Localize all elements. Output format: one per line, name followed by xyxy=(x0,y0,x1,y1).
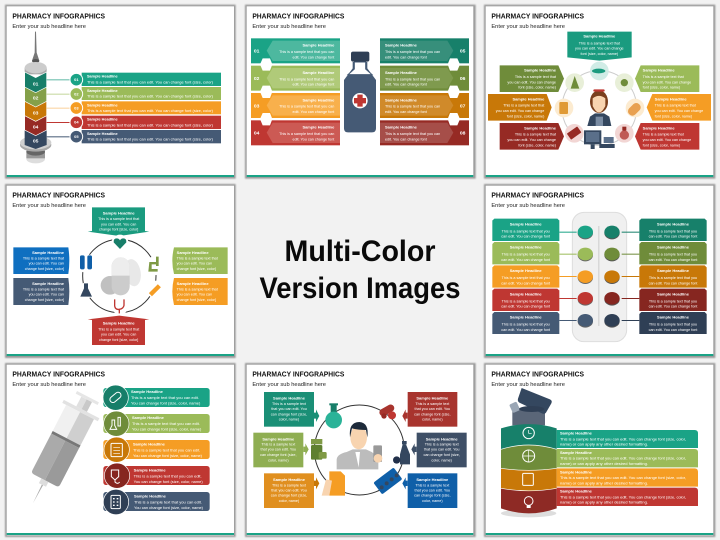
right boxes xyxy=(402,392,467,508)
title: PHARMACY INFOGRAPHICS xyxy=(12,369,105,378)
blister pack xyxy=(572,212,627,342)
row 2: Sample Headline xyxy=(560,450,593,455)
left boxes: can change font (size, xyxy=(271,412,307,416)
right rows: This is a sample text that you can xyxy=(385,50,440,54)
right rows: 08 xyxy=(460,131,466,137)
step 2 xyxy=(47,87,221,100)
right boxes: Sample Headline xyxy=(426,436,458,441)
right boxes: Sample Headline xyxy=(657,291,690,296)
left boxes: Sample Headline xyxy=(510,315,542,320)
icon: flask xyxy=(325,403,342,428)
left boxes: This is a sample text xyxy=(261,443,295,447)
step 1: This is a sample text that you can edit. You can change font (size, color) xyxy=(87,81,213,85)
callouts right xyxy=(635,65,711,150)
sub headline: Enter your sub headline here xyxy=(252,24,326,30)
left rows: Sample Headline xyxy=(302,70,335,75)
sub headline: Enter your sub headline here xyxy=(12,382,86,388)
step 3: 03 xyxy=(74,105,79,110)
left rows: 02 xyxy=(254,76,260,82)
icons around ring xyxy=(77,235,164,315)
right boxes: This is a sample text that you xyxy=(649,253,697,257)
right rows: edit. You can change font xyxy=(385,110,427,114)
row 1: You can change font (size, color, name) xyxy=(131,402,200,406)
right boxes: color, name) xyxy=(422,418,443,422)
right boxes: can edit. You can change font xyxy=(649,328,697,332)
cylinder stack xyxy=(501,424,557,517)
sub headline: Enter your sub headline here xyxy=(491,24,565,30)
connecting ring xyxy=(562,71,637,145)
left boxes: can edit. You can change font xyxy=(501,305,550,309)
right boxes: Sample Headline xyxy=(416,477,449,482)
title: PHARMACY INFOGRAPHICS xyxy=(252,11,344,20)
heading: multi-color version images xyxy=(260,235,460,305)
left boxes: Sample Headline xyxy=(262,436,295,441)
callout top: font (size, color, name) xyxy=(581,52,618,56)
callouts right: font (size, color, name) xyxy=(655,115,692,119)
step 1 xyxy=(47,73,221,86)
callouts left xyxy=(488,65,564,150)
callout top: change font [size, color] xyxy=(99,228,138,232)
right boxes: This is a sample text xyxy=(425,443,459,447)
icon: capsules xyxy=(101,257,143,295)
left boxes: Sample Headline xyxy=(273,477,306,482)
callouts left: Sample Headline xyxy=(524,68,557,73)
callouts right: Sample Headline xyxy=(643,125,675,130)
row 3: Sample Headline xyxy=(133,441,166,446)
step 4: This is a sample text that you can edit. You can change font (size, color) xyxy=(87,123,213,127)
row 4: You can change font (size, color, name) xyxy=(134,480,203,484)
left boxes: Sample Headline xyxy=(510,268,542,273)
left boxes: color, name) xyxy=(279,499,299,503)
row 4: Sample Headline xyxy=(560,489,593,494)
callouts left: you can edit. You can change xyxy=(507,80,556,84)
callouts right: font (size, color, name) xyxy=(643,86,680,90)
right boxes: that you can edit. You xyxy=(424,448,459,452)
callouts right: change font [size, color] xyxy=(177,267,216,271)
panel: syringe list xyxy=(5,363,236,537)
sub headline: Enter your sub headline here xyxy=(252,382,326,388)
syringe illustration: 02 xyxy=(33,96,39,102)
row 4 xyxy=(557,488,698,506)
right boxes: This is a sample text that you xyxy=(649,299,697,303)
left boxes: This is a sample text xyxy=(272,483,306,487)
row 2: Sample Headline xyxy=(132,415,165,420)
row 1: This is a sample text that you can edit. You can change font (size, color, xyxy=(560,437,686,441)
left rows: Sample Headline xyxy=(302,125,335,130)
row 1: name) or can apply any other desired formatting. xyxy=(560,443,648,447)
icon circles xyxy=(555,62,644,143)
right boxes: can change font (size, xyxy=(414,412,451,416)
callouts left: Sample Headline xyxy=(32,281,65,286)
right boxes: color, name) xyxy=(431,458,452,462)
row 4 xyxy=(103,463,210,488)
step 3: Sample Headline xyxy=(87,102,118,107)
row 2: name) or can apply any other desired formatting. xyxy=(560,462,648,466)
right boxes: This is a sample text xyxy=(415,483,449,487)
icon: pharmacist xyxy=(584,89,615,149)
right rows: This is a sample text that you can xyxy=(385,105,440,109)
panel: pill cycle xyxy=(5,184,236,358)
callout bottom: This is a sample text that xyxy=(98,327,139,331)
callouts left: Sample Headline xyxy=(524,125,557,130)
right boxes: that you can edit. You xyxy=(415,407,450,411)
callouts right: This is a sample text that xyxy=(177,287,218,291)
callout top xyxy=(567,32,632,61)
row 2: This is a sample text that you can edit. You can change font (size, color, xyxy=(560,457,686,461)
panel: pharmacist hexagon xyxy=(484,5,715,179)
icon: large syringe xyxy=(15,387,106,512)
syringe illustration xyxy=(20,32,51,163)
sub headline: Enter your sub headline here xyxy=(491,203,565,209)
callouts left: you can edit. You can xyxy=(29,293,64,297)
callouts left: This is a sample text that xyxy=(23,287,64,291)
cycle ring xyxy=(83,239,156,313)
callouts right: This is a sample text that xyxy=(177,256,218,260)
step 3 xyxy=(47,101,221,114)
right boxes: Sample Headline xyxy=(657,315,690,320)
left boxes xyxy=(253,392,319,508)
icon: pills xyxy=(378,403,396,419)
panel: pharmacist cycle xyxy=(245,363,476,537)
callouts left: This is a sample text that xyxy=(515,133,556,137)
callouts right: you can edit. You can xyxy=(177,262,212,266)
left rows xyxy=(251,38,340,145)
row 4: This is a sample text that you can edit. xyxy=(134,474,202,478)
right rows: edit. You can change font xyxy=(385,137,427,141)
row 3: This is a sample text that you can edit. You can change font (size, color, xyxy=(560,476,686,480)
syringe illustration: 04 xyxy=(33,124,39,130)
row 1 xyxy=(103,385,210,410)
step 1: 01 xyxy=(74,77,79,82)
left boxes: Sample Headline xyxy=(510,245,542,250)
left rows: 01 xyxy=(254,49,260,55)
callouts right: Sample Headline xyxy=(655,96,687,101)
icon: blister xyxy=(373,467,402,494)
callout top: you can edit. You can change xyxy=(575,47,624,51)
right rows: Sample Headline xyxy=(385,43,418,48)
callouts right: you can edit. You can change xyxy=(643,80,691,84)
callouts left xyxy=(13,247,69,305)
title: PHARMACY INFOGRAPHICS xyxy=(12,11,105,20)
row 4: Sample Headline xyxy=(134,467,166,472)
left rows: edit. You can change font xyxy=(293,55,334,59)
callouts left: you can edit. You can change xyxy=(507,138,556,142)
callout bottom: Sample Headline xyxy=(103,321,135,326)
row 3: You can change font (size, color, name) xyxy=(133,454,202,458)
step 5 xyxy=(47,130,221,143)
callouts left: This is a sample text that xyxy=(503,104,544,108)
syringe illustration: 01 xyxy=(33,82,39,88)
left boxes: that you can edit. You xyxy=(271,488,307,492)
panel: blister pack xyxy=(484,184,715,358)
row 2: You can change font (size, color, name) xyxy=(132,428,201,432)
right rows: This is a sample text that you can xyxy=(385,132,440,136)
row 2: This is a sample text that you can edit. xyxy=(132,422,200,426)
title: PHARMACY INFOGRAPHICS xyxy=(491,11,584,20)
left boxes: Sample Headline xyxy=(273,396,306,401)
left rows: This is a sample text that you can xyxy=(279,50,334,54)
syringe illustration: 03 xyxy=(33,110,39,116)
left boxes: can edit. You can change font xyxy=(501,328,550,332)
step 5: Sample Headline xyxy=(87,131,118,136)
row 3: Sample Headline xyxy=(560,469,593,474)
left boxes: can edit. You can change font xyxy=(501,281,550,285)
right rows: 07 xyxy=(460,103,466,109)
row 1: Sample Headline xyxy=(560,431,593,436)
step 1: Sample Headline xyxy=(87,74,118,79)
step 4 xyxy=(47,116,221,129)
step 2: Sample Headline xyxy=(87,88,118,93)
row 2 xyxy=(103,411,210,436)
row 5 xyxy=(103,489,210,515)
right boxes: can change font (size, xyxy=(423,453,460,457)
callout top: This is a sample text that xyxy=(98,217,139,221)
callouts left: Sample Headline xyxy=(512,96,545,101)
sub headline: Enter your sub headline here xyxy=(12,24,86,30)
left boxes: can edit. You can change font xyxy=(501,235,550,239)
callout bottom: change font [size, color] xyxy=(99,338,138,342)
callouts left: font (size, color, name) xyxy=(518,86,556,90)
left rows: edit. You can change font xyxy=(293,110,334,114)
left boxes: This is a sample text that you xyxy=(502,229,550,233)
sub headline: Enter your sub headline here xyxy=(491,382,565,388)
callouts left: you can edit. You can xyxy=(29,262,64,266)
left rows: edit. You can change font xyxy=(293,137,334,141)
heading: multi-color version images: Version Images xyxy=(260,272,460,305)
sub headline: Enter your sub headline here xyxy=(12,203,86,209)
callout top: This is a sample text that xyxy=(579,41,620,45)
row 3 xyxy=(557,468,698,487)
right boxes: This is a sample text that you xyxy=(649,323,697,327)
callout top: Sample Headline xyxy=(103,210,135,215)
row 3: name) or can apply any other desired formatting. xyxy=(560,481,648,485)
right rows: edit. You can change font xyxy=(385,55,427,59)
step 5: This is a sample text that you can edit. You can change font (size, color) xyxy=(87,138,213,142)
callouts right: you can edit. You can change xyxy=(655,109,703,113)
row 3 xyxy=(103,437,210,462)
step 2: 02 xyxy=(74,91,79,96)
step 2: This is a sample text that you can edit. You can change font (size, color) xyxy=(87,95,213,99)
callout bottom: you can edit. You can xyxy=(101,333,136,337)
step 4: Sample Headline xyxy=(87,117,118,122)
left rows: This is a sample text that you can xyxy=(279,77,334,81)
icon: prescription xyxy=(322,471,345,496)
callouts left: change font [size, color] xyxy=(25,267,64,271)
right boxes: This is a sample text xyxy=(415,402,449,406)
right rows: This is a sample text that you can xyxy=(385,77,440,81)
cycle ring xyxy=(314,405,404,495)
panel: bottle eight steps xyxy=(245,5,476,179)
left boxes: that you can edit. You xyxy=(271,407,307,411)
right rows: 05 xyxy=(460,49,466,55)
row 4: name) or can apply any other desired formatting. xyxy=(560,501,648,505)
left rows: This is a sample text that you can xyxy=(279,132,334,136)
right rows: Sample Headline xyxy=(385,97,418,102)
left boxes: This is a sample text that you xyxy=(502,323,550,327)
left rows: edit. You can change font xyxy=(293,83,334,87)
icon: dropper bottle xyxy=(393,441,410,464)
right boxes: can edit. You can change font xyxy=(649,305,697,309)
row 5: Sample Headline xyxy=(134,493,167,498)
title: PHARMACY INFOGRAPHICS xyxy=(491,369,584,378)
callouts right: font (size, color, name) xyxy=(643,144,680,148)
callouts right: This is a sample text that xyxy=(643,75,684,79)
right boxes xyxy=(622,219,707,334)
row 4: This is a sample text that you can edit. You can change font (size, color, xyxy=(560,495,686,499)
callouts left: This is a sample text that xyxy=(515,75,556,79)
right boxes: Sample Headline xyxy=(657,221,690,226)
left boxes: This is a sample text that you xyxy=(502,253,550,257)
right rows xyxy=(380,38,469,145)
callouts left: you can edit. You can change xyxy=(496,109,544,113)
right boxes: can edit. You can change font xyxy=(649,235,697,239)
row 5: This is a sample text that you can edit. xyxy=(134,500,202,504)
callout bottom xyxy=(88,316,149,345)
callouts right: Sample Headline xyxy=(177,281,209,286)
row 3: This is a sample text that you can edit. xyxy=(133,448,200,452)
row 1: Sample Headline xyxy=(131,389,164,394)
row 2 xyxy=(557,449,698,467)
callouts right: This is a sample text that xyxy=(643,133,684,137)
left boxes: This is a sample text that you xyxy=(502,299,550,303)
right rows: Sample Headline xyxy=(385,125,418,130)
step 4: 04 xyxy=(74,120,79,125)
left boxes: that you can edit. You xyxy=(261,448,296,452)
left rows: Sample Headline xyxy=(302,97,335,102)
syringe illustration: 05 xyxy=(33,139,39,145)
title: PHARMACY INFOGRAPHICS xyxy=(491,190,584,199)
heading: multi-color version images: Multi-Color xyxy=(284,235,436,268)
callouts left: This is a sample text that xyxy=(23,256,64,260)
callouts right: you can edit. You can change xyxy=(643,138,691,142)
left boxes: Sample Headline xyxy=(510,221,542,226)
left boxes: color, name) xyxy=(279,418,299,422)
callouts left: font (size, color, name) xyxy=(507,115,544,119)
right rows: Sample Headline xyxy=(385,70,418,75)
panel: syringe steps xyxy=(5,5,236,179)
row 5: You can change font (size, color, name) xyxy=(134,506,203,510)
right boxes: Sample Headline xyxy=(657,268,690,273)
left rows: Sample Headline xyxy=(302,43,335,48)
callouts left: change font [size, color] xyxy=(25,298,64,302)
callout top: you can edit. You can xyxy=(101,222,136,226)
right rows: 06 xyxy=(460,76,466,82)
row 1: This is a sample text that you can edit. xyxy=(131,396,199,400)
icon: jar xyxy=(311,439,327,460)
right boxes: can change font (size, xyxy=(414,494,451,498)
left boxes: color, name) xyxy=(268,458,289,462)
callouts right: Sample Headline xyxy=(177,250,209,255)
left boxes: This is a sample text that you xyxy=(502,276,550,280)
right boxes: that you can edit. You xyxy=(415,488,450,492)
callouts right: you can edit. You can xyxy=(177,293,212,297)
title: PHARMACY INFOGRAPHICS xyxy=(12,190,105,199)
callouts left: Sample Headline xyxy=(32,250,65,255)
right boxes: Sample Headline xyxy=(657,245,690,250)
step 5: 05 xyxy=(74,134,79,139)
right boxes: color, name) xyxy=(422,499,443,503)
left rows: 03 xyxy=(254,103,260,109)
right boxes: can edit. You can change font xyxy=(649,258,697,262)
right boxes: This is a sample text that you xyxy=(649,229,697,233)
panel: bottle stack xyxy=(484,363,715,537)
title: PHARMACY INFOGRAPHICS xyxy=(252,369,344,378)
row 1 xyxy=(557,430,698,448)
left boxes: can change font (size, xyxy=(260,453,297,457)
step 3: This is a sample text that you can edit. You can change font (size, color) xyxy=(87,109,213,113)
left boxes xyxy=(492,219,577,334)
callouts right: Sample Headline xyxy=(643,68,675,73)
callouts right: This is a sample text that xyxy=(655,104,696,108)
left boxes: Sample Headline xyxy=(510,291,542,296)
right rows: edit. You can change font xyxy=(385,83,427,87)
callout top: Sample Headline xyxy=(583,34,616,39)
right boxes: can edit. You can change font xyxy=(649,281,697,285)
left boxes: can edit. You can change font xyxy=(501,258,550,262)
callouts left: font (size, color, name) xyxy=(518,144,556,148)
left rows: 04 xyxy=(254,131,260,137)
left boxes: This is a sample text xyxy=(272,402,306,406)
icon: medicine bottle xyxy=(344,52,376,132)
callouts right xyxy=(172,247,228,305)
callout top xyxy=(88,207,149,236)
icon: pharmacist xyxy=(337,422,382,469)
right boxes: This is a sample text that you xyxy=(649,276,697,280)
callouts right: change font [size, color] xyxy=(177,298,216,302)
right boxes: Sample Headline xyxy=(416,396,449,401)
icon: open bottle xyxy=(509,388,552,425)
left rows: This is a sample text that you can xyxy=(279,105,334,109)
left boxes: can change font (size, xyxy=(271,494,307,498)
